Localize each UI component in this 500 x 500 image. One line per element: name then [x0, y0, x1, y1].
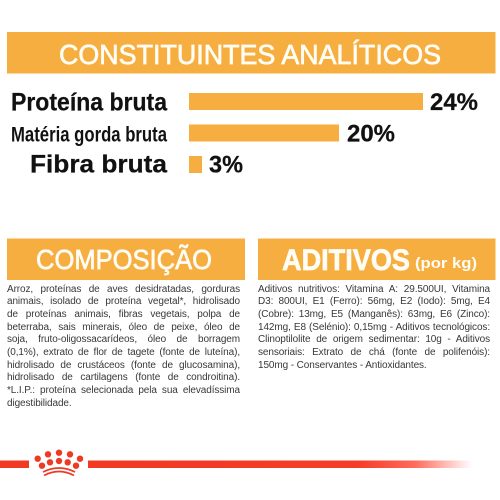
heading: constituintes analíticos: CONSTITUINTES ANALÍTICOS — [59, 39, 441, 70]
text block: additives: 142mg, E8 (Selénio): 0,15mg - Aditivos tecnológicos: — [258, 322, 490, 333]
heading: aditivos por kg: ADITIVOS — [282, 244, 410, 277]
icon: royal canin crown — [34, 450, 83, 476]
heading: constituintes analíticos — [7, 32, 496, 74]
text block: additives: D3: 800UI, E1 (Ferro): 56mg, E2 (Iodo): 5mg, E4 — [258, 296, 490, 307]
heading: composição — [7, 238, 245, 280]
text block: composition: animais, isolado de proteína vegetal*, hidrolisado — [7, 296, 240, 307]
panel: composição — [7, 238, 245, 409]
bar row: matéria gorda bruta 20% — [11, 120, 395, 148]
footer: royal canin logo band — [0, 450, 469, 476]
heading: aditivos por kg — [258, 238, 496, 280]
panel: aditivos — [258, 238, 496, 371]
text block: additives: sensoriais: Extrato de chá (fonte de polifenóis): — [258, 347, 490, 358]
text block: composition: digestibilidade. — [7, 398, 72, 409]
panel: analytical constituents — [7, 32, 496, 178]
text block: composition: de proteínas animais, fibras vegetais, polpa de — [7, 309, 240, 320]
text block: composition — [7, 284, 240, 409]
bar chart: nutrient percentages — [11, 88, 478, 178]
text block: composition: hidrolisado de cartilagens (fonte de condroitina). — [7, 372, 240, 383]
text block: additives: Clinoptilolite de origem sedimentar: 10g - Aditivos — [258, 334, 490, 345]
text block: additives: (Cobre): 13mg, E5 (Manganês): 63mg, E6 (Zinco): — [258, 309, 490, 320]
text block: composition: beterraba, sais minerais, óleo de peixe, óleo de — [7, 322, 240, 333]
text block: additives: Aditivos nutritivos: Vitamina A: 29.500UI, Vitamina — [258, 284, 490, 294]
bar row: fibra bruta 3%: 3% — [209, 152, 243, 178]
text block: composition: soja, fruto-oligossacarídeos, óleo de borragem — [7, 334, 240, 345]
text block: composition: *L.I.P.: proteína selecionada pela sua elevadíssima — [7, 385, 240, 396]
text block: composition: (0,1%), extrato de flor de tagete (fonte de luteína), — [7, 347, 240, 358]
bar row: proteína bruta 24%: 24% — [430, 89, 478, 116]
bar row: matéria gorda bruta 20%: Matéria gorda bruta — [11, 122, 168, 146]
bar row: fibra bruta 3% — [30, 150, 243, 178]
text block: additives: 150mg - Conservantes - Antioxidantes. — [258, 360, 427, 371]
bar row: matéria gorda bruta 20%: 20% — [347, 120, 395, 148]
heading: composição: COMPOSIÇÃO — [36, 244, 212, 275]
text block: composition: hidrolisado de crustáceos (fonte de glucosamina), — [7, 360, 240, 371]
bar row: proteína bruta 24%: Proteína bruta — [11, 88, 168, 116]
text block: composition: Arroz, proteínas de aves desidratadas, gorduras — [7, 284, 240, 294]
heading: aditivos por kg: (por kg) — [415, 255, 477, 272]
bar row: proteína bruta 24% — [11, 88, 478, 116]
bar row: fibra bruta 3%: Fibra bruta — [30, 150, 168, 178]
text block: additives — [258, 284, 490, 371]
